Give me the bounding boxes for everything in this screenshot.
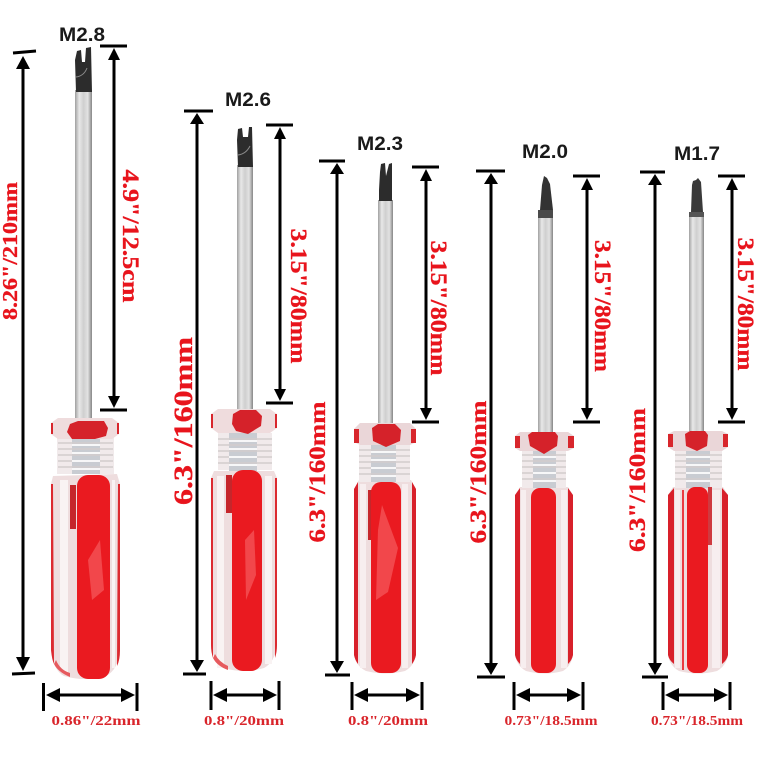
- width labels: 0.73"/18.5mm: [651, 714, 743, 729]
- screwdriver M2.0: [515, 176, 574, 674]
- screwdriver M2.3: [354, 163, 416, 674]
- vertical length labels: 3.15"/80mm: [426, 240, 451, 376]
- vertical length labels: 3.15"/80mm: [590, 240, 615, 372]
- size labels: M2.0: [522, 142, 568, 163]
- vertical length labels: 3.15"/80mm: [286, 228, 311, 364]
- vertical length labels: 6.3"/160mm: [625, 408, 650, 552]
- screwdriver M1.7: [668, 178, 728, 674]
- vertical length labels: 6.3"/160mm: [466, 400, 491, 544]
- total length arrows: [12, 51, 668, 677]
- width labels: 0.8"/20mm: [204, 714, 284, 729]
- vertical length labels: 4.9"/12.5cm: [118, 170, 143, 302]
- vertical length labels: 6.3"/160mm: [169, 337, 198, 505]
- size labels: [59, 25, 720, 165]
- vertical length labels: 3.15"/80mm: [733, 238, 758, 370]
- shaft length arrows: [100, 46, 745, 422]
- screwdriver M2.8: [51, 47, 120, 679]
- vertical length labels: [0, 170, 758, 552]
- size labels: M2.8: [59, 25, 105, 46]
- width labels: 0.73"/18.5mm: [504, 714, 598, 729]
- size labels: M2.6: [225, 90, 271, 111]
- width labels: 0.86"/22mm: [52, 714, 141, 729]
- size labels: M2.3: [357, 134, 403, 155]
- screwdriver M2.6: [211, 127, 277, 671]
- vertical length labels: 6.3"/160mm: [305, 402, 330, 542]
- width labels: 0.8"/20mm: [348, 714, 428, 729]
- size labels: M1.7: [674, 144, 720, 165]
- width labels: [52, 714, 743, 729]
- width arrows: [44, 681, 730, 711]
